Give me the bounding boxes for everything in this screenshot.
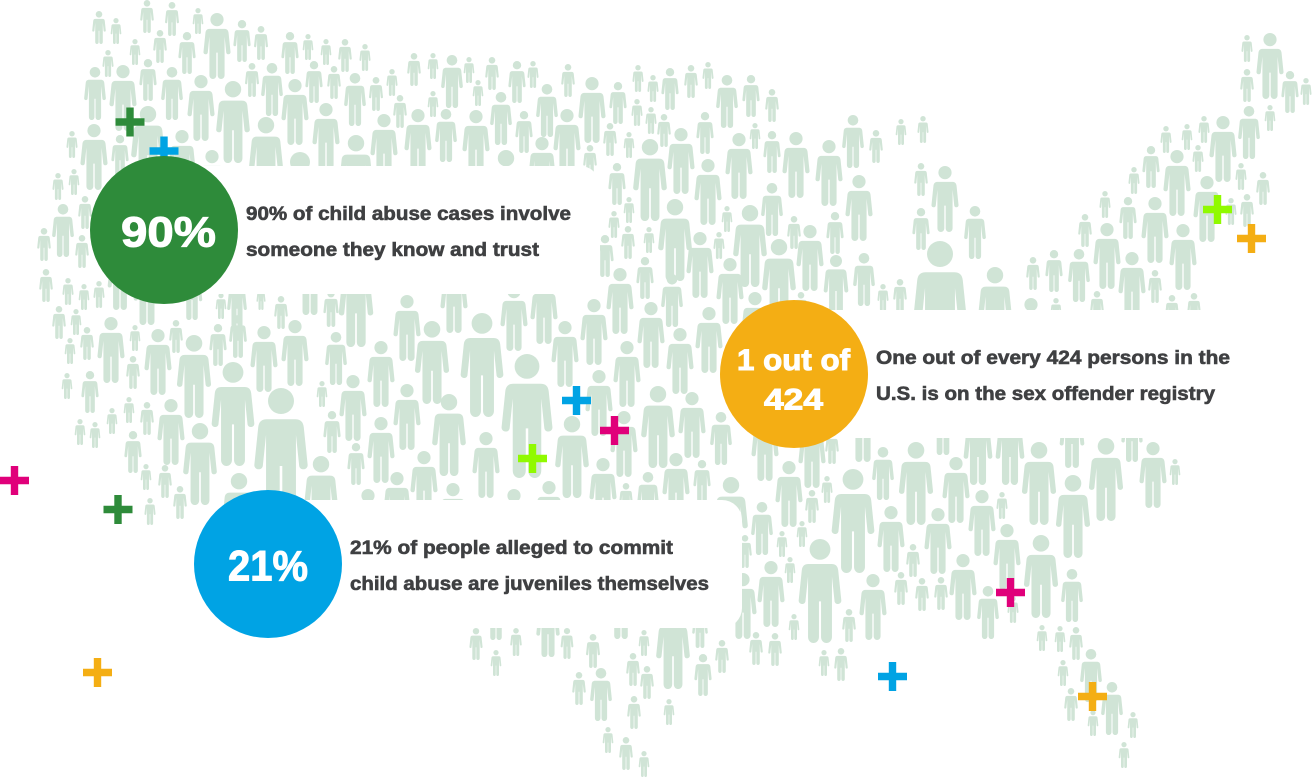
green circle with 90%: 90% [121, 208, 216, 256]
description text: someone they know and trust [246, 239, 540, 261]
plus marker: amber Florida [1078, 682, 1107, 711]
blue circle with 21% [194, 490, 342, 638]
green circle with 90% [90, 156, 238, 304]
description text: 21% of people alleged to commit [350, 537, 674, 559]
description text [246, 203, 571, 261]
callout: 90 percent statistic [90, 156, 600, 304]
plus marker: magenta center [600, 416, 629, 445]
description text [350, 537, 709, 595]
plus marker: lime center [518, 444, 547, 473]
plus marker: green top left [116, 108, 144, 136]
amber circle with 1 out of 424: 424 [764, 384, 823, 416]
plus marker: magenta far left [0, 466, 29, 495]
description text: 90% of child abuse cases involve [246, 203, 571, 225]
callout: 21 percent statistic [194, 490, 742, 638]
plus marker: amber lower left [83, 658, 112, 687]
plus marker: amber northeast [1237, 224, 1266, 253]
amber circle with 1 out of 424 [720, 300, 868, 448]
callout panel [790, 310, 1252, 438]
plus marker: lime northeast [1203, 195, 1232, 224]
plus marker: green lower left [104, 495, 132, 524]
callout panel [264, 500, 742, 628]
plus marker: blue center [562, 386, 591, 415]
callout: 1 out of 424 statistic [720, 300, 1252, 448]
plus marker: blue south [878, 662, 907, 691]
blue circle with 21%: 21% [228, 542, 308, 590]
description text: child abuse are juveniles themselves [350, 573, 709, 595]
plus marker: magenta southeast [996, 578, 1025, 607]
description text: One out of every 424 persons in the [876, 347, 1230, 369]
amber circle with 1 out of 424: 1 out of [737, 344, 851, 377]
description text [876, 347, 1230, 405]
plus marker: blue behind green circle [150, 136, 178, 166]
description text: U.S. is on the sex offender registry [876, 383, 1215, 405]
callout panel [160, 166, 600, 294]
